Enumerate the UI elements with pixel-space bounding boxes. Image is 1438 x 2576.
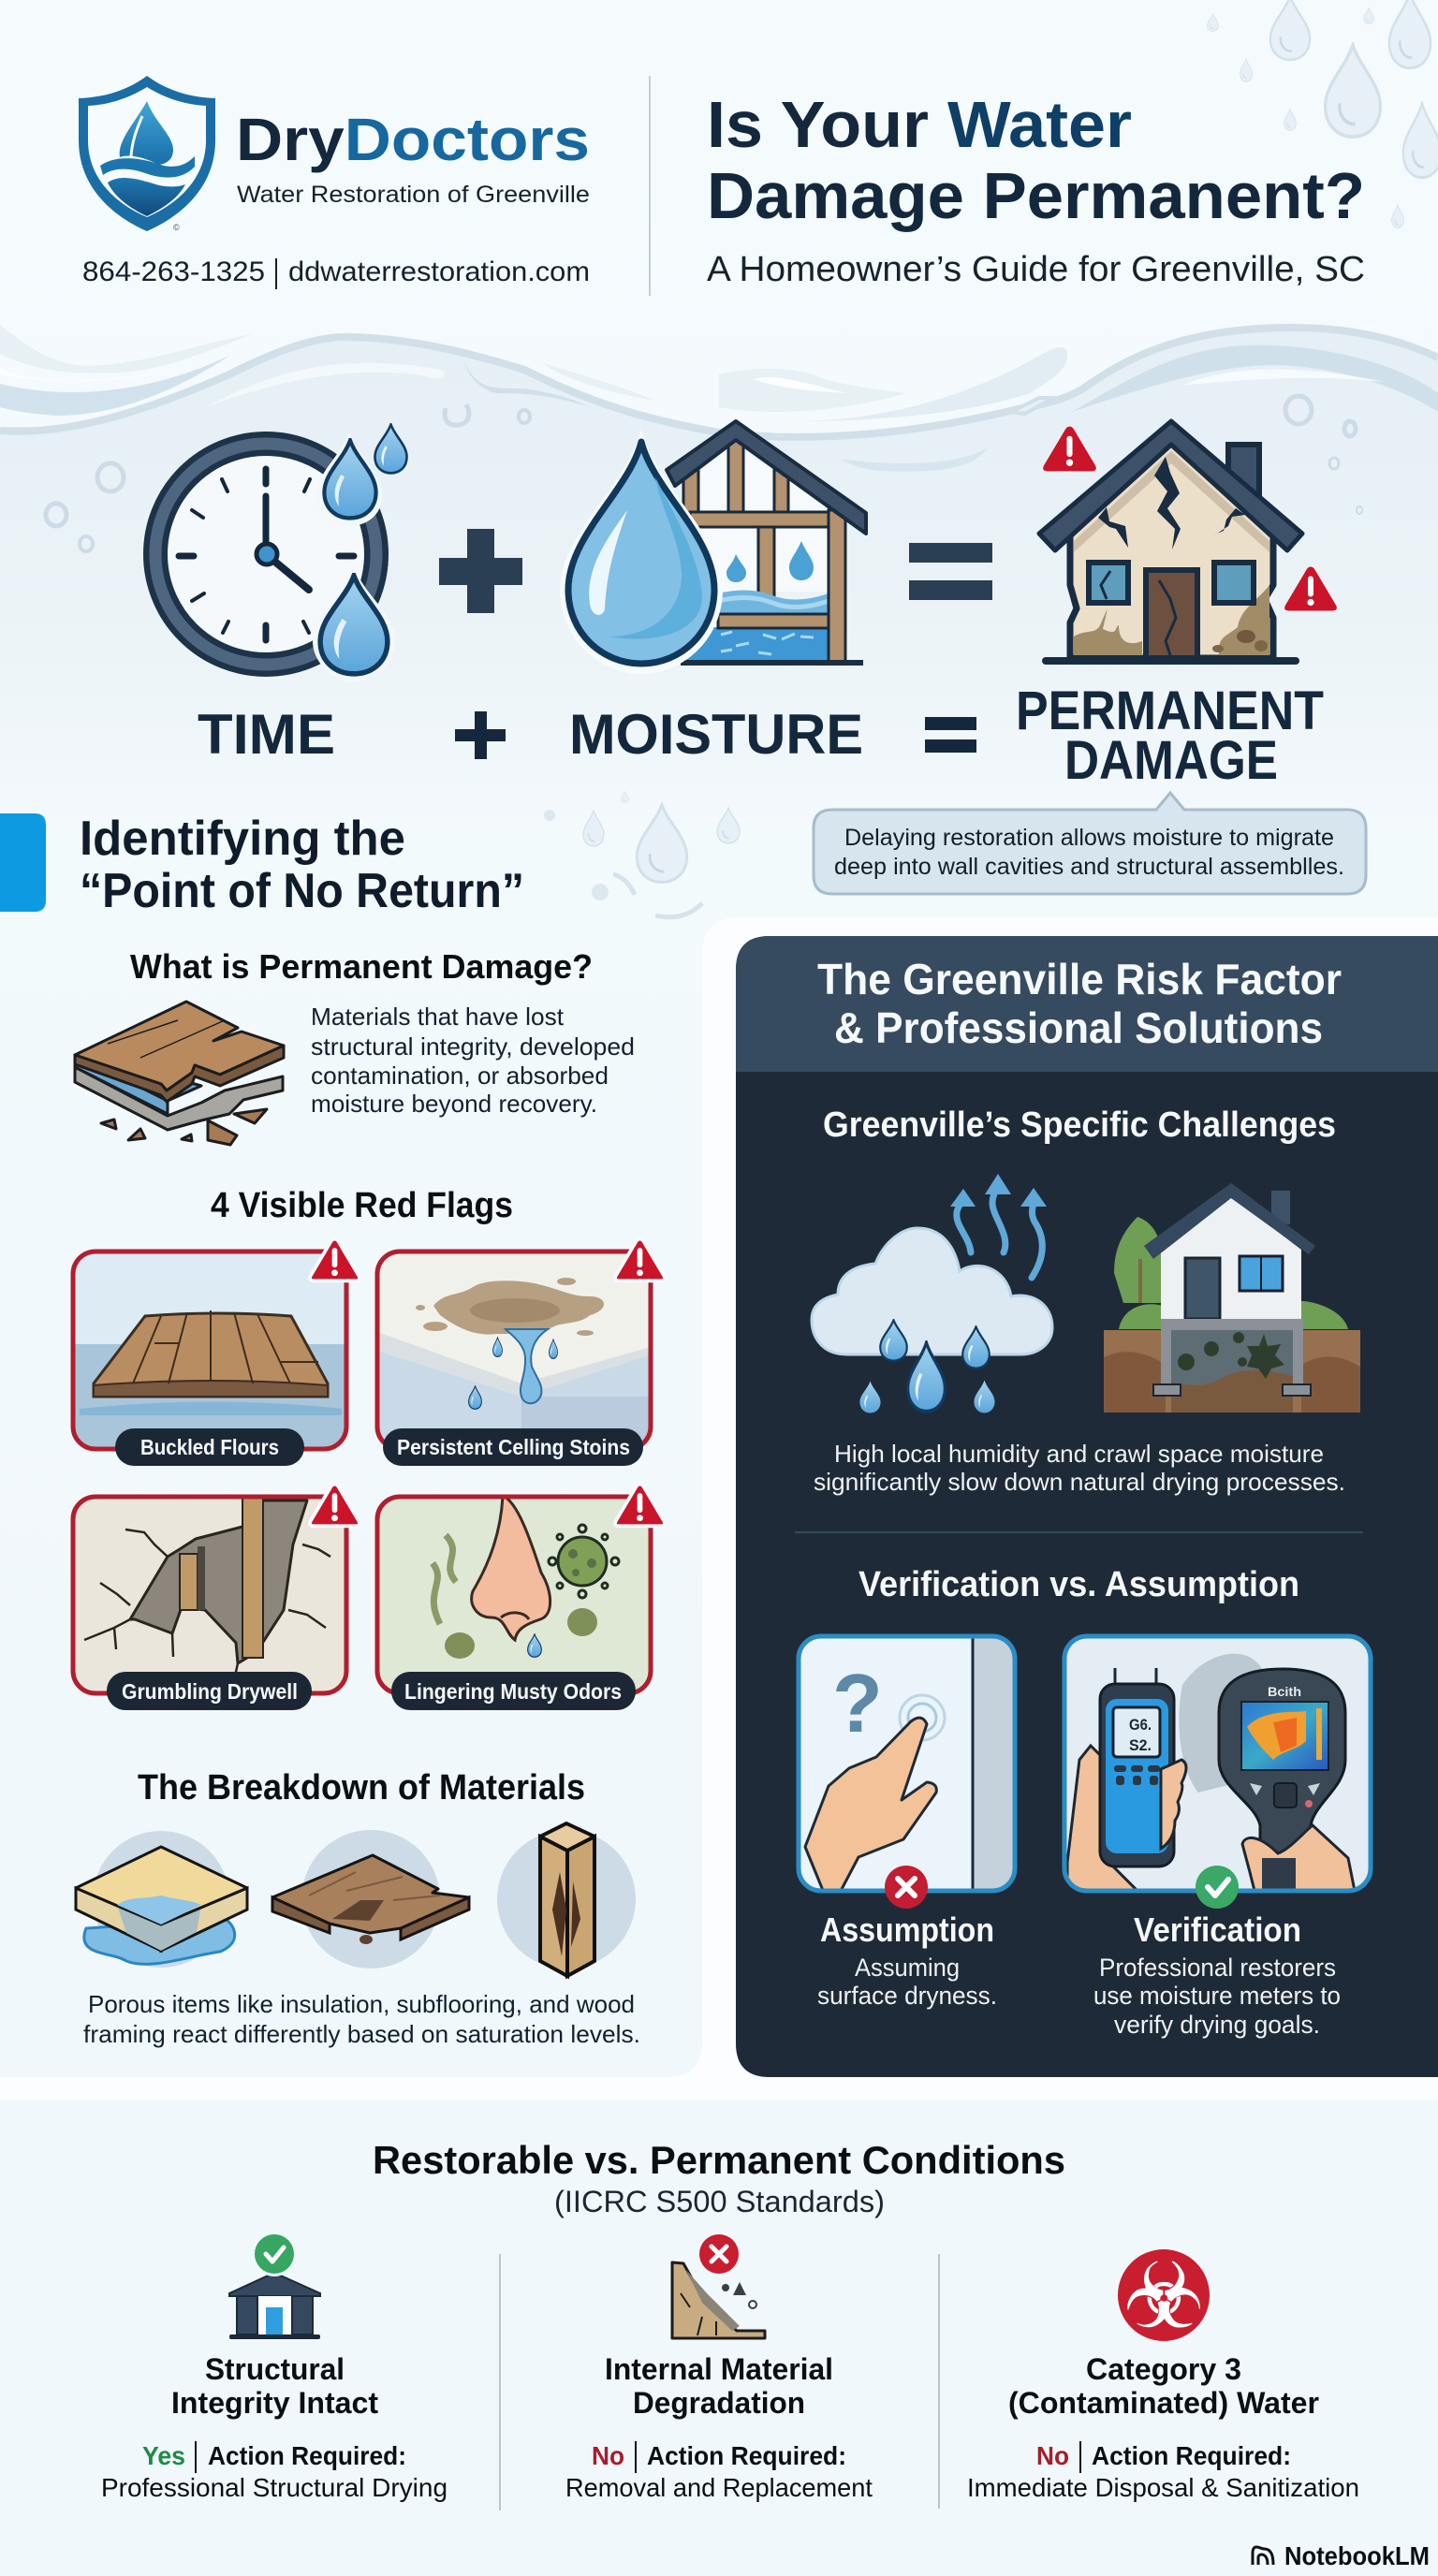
footer heading: Restorable vs. Permanent Conditions	[373, 2138, 1065, 2182]
icon: cracked wood post	[497, 1823, 636, 1976]
contact line	[82, 256, 590, 289]
text: assumption: Assumption	[820, 1910, 994, 1949]
title: Internal Material	[605, 2352, 833, 2386]
panel: greenville risk factor	[736, 936, 1438, 2077]
status and action	[101, 2441, 448, 2502]
background water wave band	[0, 325, 1438, 824]
icon: shield with water drop: ©	[173, 223, 180, 232]
equation label: equals	[925, 717, 976, 753]
equals sign	[909, 543, 992, 600]
card: buckled floors	[73, 1239, 360, 1466]
column: category 3 water	[967, 2244, 1359, 2502]
section heading	[80, 812, 524, 918]
icon: soaked insulation	[76, 1831, 247, 1968]
panel title: The Greenville Risk Factor	[817, 955, 1342, 1003]
card: ceiling stains	[377, 1239, 665, 1466]
equation label: permanent damage: PERMANENT	[1016, 681, 1324, 741]
card: crumbling drywall	[73, 1485, 360, 1710]
main title	[707, 88, 1365, 232]
panel title	[817, 955, 1342, 1052]
equation label: time: TIME	[198, 703, 335, 766]
text: permanent damage definition: Materials that have lost	[311, 1003, 565, 1031]
equation label: plus	[455, 711, 506, 759]
title	[171, 2352, 378, 2420]
text: materials description: framing react differently based on saturation levels.	[83, 2020, 640, 2048]
footer background	[0, 2100, 1438, 2576]
icon: damaged subfloor	[272, 1830, 469, 1969]
text: challenges description: High local humidity and crawl space moisture	[834, 1440, 1324, 1468]
text: assumption: surface dryness.	[817, 1982, 997, 2010]
header: logo	[79, 76, 590, 232]
text: verification: verify drying goals.	[1114, 2011, 1320, 2039]
status and action: No	[1036, 2441, 1069, 2470]
text: permanent damage definition: structural integrity, developed	[311, 1032, 635, 1061]
text: verification: Professional restorers	[1099, 1954, 1336, 1982]
icon: humid rain cloud	[812, 1174, 1052, 1413]
card: verification: G6.	[1129, 1716, 1152, 1734]
panel header	[736, 936, 1438, 1072]
heading: what is permanent damage: What is Permanent Damage?	[130, 947, 593, 986]
text: assumption: Assuming	[855, 1954, 960, 1982]
callout: deep into wall cavities and structural assemblles.	[834, 854, 1344, 880]
text: assumption	[817, 1910, 997, 2010]
icon: crumbling material	[672, 2232, 765, 2338]
equation label: permanent damage	[1016, 681, 1324, 791]
status and action: Action Required:	[1092, 2441, 1291, 2470]
text: permanent damage definition	[311, 1003, 635, 1118]
text: materials description	[83, 1990, 640, 2048]
label: musty odors: Lingering Musty Odors	[404, 1679, 622, 1704]
title: Degradation	[633, 2386, 805, 2420]
brand tagline: Water Restoration of Greenville	[237, 182, 590, 208]
icon: clock with drops	[155, 425, 407, 681]
decorative drops near callout	[544, 791, 740, 917]
status and action: Professional Structural Drying	[101, 2473, 448, 2502]
title: Integrity Intact	[171, 2386, 378, 2420]
footer subheading: (IICRC S500 Standards)	[554, 2185, 885, 2218]
icon: house over moist crawl space	[1104, 1183, 1360, 1412]
icon: biohazard: ☣	[1123, 2244, 1204, 2349]
column: internal material degradation	[565, 2232, 873, 2502]
label: ceiling stains	[383, 1428, 643, 1466]
card: verification	[1064, 1636, 1371, 1909]
status and action: No	[592, 2441, 624, 2470]
icon: red x badge	[885, 1866, 928, 1909]
title	[1008, 2352, 1319, 2420]
text: verification: Verification	[1134, 1910, 1301, 1949]
label: crumbling drywall: Grumbling Drywell	[122, 1679, 298, 1704]
label: buckled floors	[115, 1428, 304, 1466]
status and action: Yes	[142, 2441, 185, 2470]
section heading: Identifying the	[80, 812, 405, 866]
icon: green check badge	[1196, 1866, 1239, 1909]
status and action	[967, 2441, 1359, 2502]
text: materials description: Porous items like insulation, subflooring, and wood	[88, 1990, 635, 2018]
icon: intact building	[229, 2232, 320, 2339]
subtitle: A Homeowner’s Guide for Greenville, SC	[707, 250, 1365, 289]
card: verification: Bcith	[1268, 1684, 1301, 1699]
callout: Delaying restoration allows moisture to migrate	[844, 825, 1334, 851]
icon: broken floor layers	[75, 1002, 284, 1145]
card: assumption	[799, 1636, 1015, 1909]
title: (Contaminated) Water	[1008, 2386, 1319, 2420]
main title: Damage Permanent?	[707, 159, 1365, 232]
section heading: “Point of No Return”	[80, 864, 524, 918]
card: assumption: ?	[832, 1657, 883, 1749]
panel body	[736, 936, 1438, 2077]
equation label: permanent damage: DAMAGE	[1064, 730, 1278, 791]
icon: warning	[615, 1485, 665, 1526]
icon: warning triangle upper	[1043, 427, 1096, 471]
plus sign	[439, 529, 522, 613]
section tab	[0, 813, 46, 912]
icon: warning triangle lower	[1284, 567, 1337, 610]
main title: Is Your Water	[707, 88, 1132, 161]
card: verification: S2.	[1129, 1736, 1152, 1754]
text: permanent damage definition: contamination, or absorbed	[311, 1061, 609, 1090]
status and action: Removal and Replacement	[565, 2473, 873, 2502]
text: verification	[1093, 1910, 1341, 2039]
heading: verification vs assumption: Verification vs. Assumption	[858, 1565, 1299, 1604]
icon: warning	[310, 1239, 360, 1281]
contact line: 864-263-1325	[82, 256, 265, 287]
title: Structural	[205, 2352, 345, 2386]
brand name: DryDoctors	[236, 106, 590, 173]
text: permanent damage definition: moisture beyond recovery.	[311, 1090, 597, 1118]
icon: flooded house framing with water drop	[560, 421, 866, 674]
status and action	[565, 2441, 873, 2502]
label: buckled floors: Buckled Flours	[140, 1435, 279, 1459]
icon: shield with water drop	[79, 76, 215, 232]
equation label: moisture: MOISTURE	[569, 703, 863, 766]
column: structural integrity	[101, 2232, 448, 2502]
card: musty odors	[377, 1485, 665, 1710]
label: ceiling stains: Persistent Celling Stoins	[397, 1435, 630, 1459]
label: musty odors	[391, 1672, 636, 1710]
status and action: Action Required:	[208, 2441, 406, 2470]
text: challenges description: significantly slow down natural drying processes.	[814, 1468, 1345, 1496]
title: Category 3	[1086, 2352, 1241, 2386]
heading: specific challenges: Greenville’s Specific Challenges	[823, 1105, 1336, 1145]
text: verification: use moisture meters to	[1093, 1982, 1341, 2010]
background bubbles around equation	[46, 396, 1362, 551]
label: crumbling drywall	[107, 1672, 312, 1710]
text: challenges description	[814, 1440, 1345, 1496]
white gutter around dark panel	[0, 917, 1438, 2100]
callout	[814, 793, 1366, 894]
icon: damaged house	[1039, 421, 1302, 665]
contact line: ddwaterrestoration.com	[288, 256, 590, 287]
heading: breakdown of materials: The Breakdown of Materials	[138, 1768, 585, 1808]
background water drops, top right	[1208, 0, 1438, 227]
status and action: Immediate Disposal & Sanitization	[967, 2473, 1359, 2502]
heading: 4 visible red flags: 4 Visible Red Flags	[211, 1186, 513, 1225]
icon: warning	[615, 1239, 665, 1281]
icon: warning	[310, 1485, 360, 1526]
title	[605, 2352, 833, 2420]
status and action: Action Required:	[647, 2441, 846, 2470]
panel title: & Professional Solutions	[834, 1003, 1323, 1052]
